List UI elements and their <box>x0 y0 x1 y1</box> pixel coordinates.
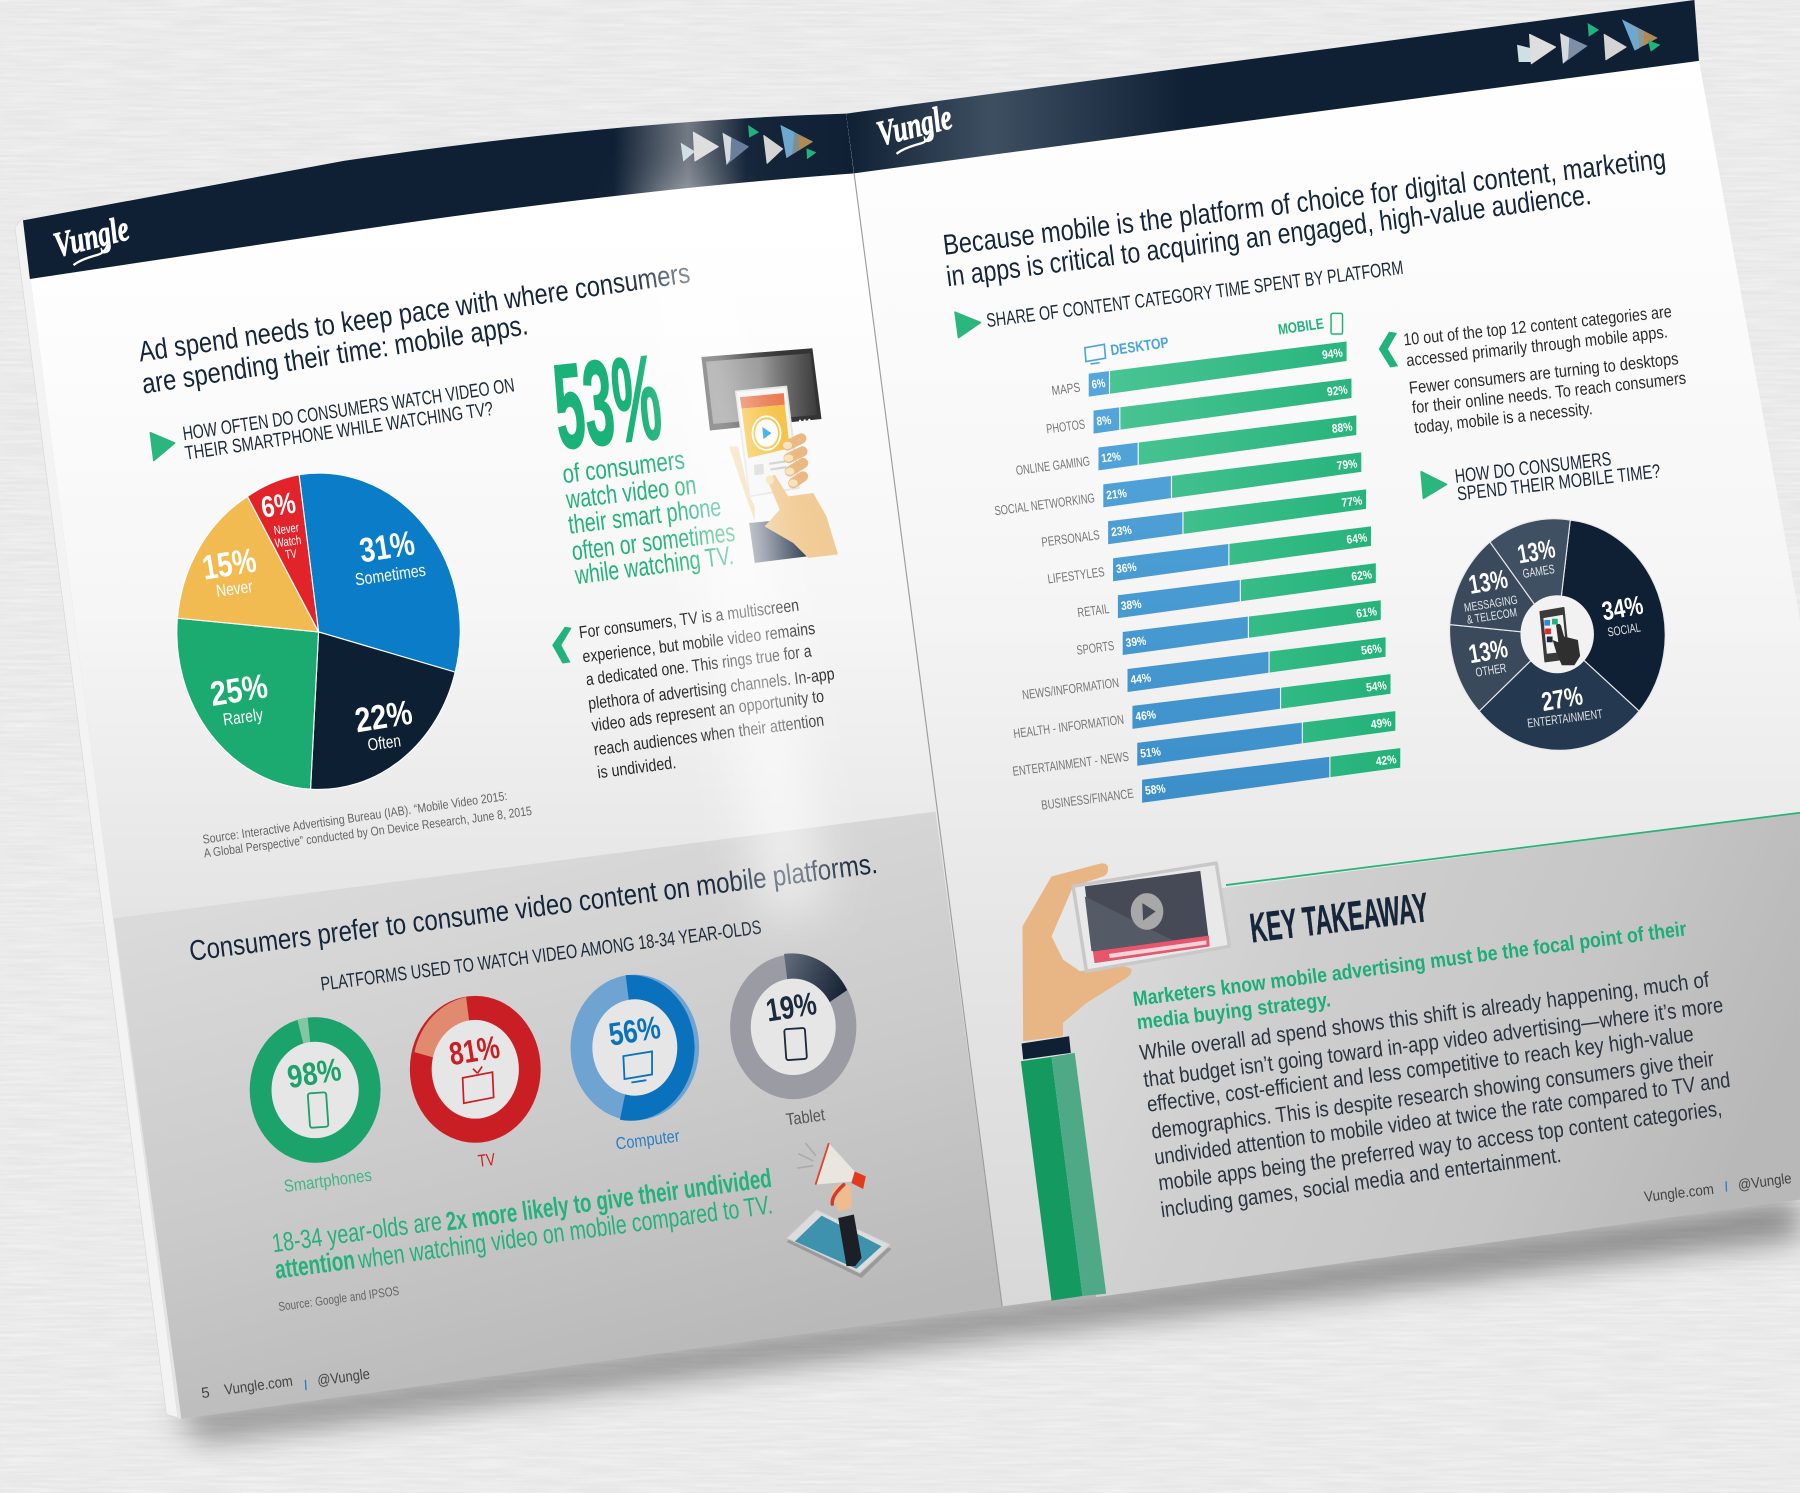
footer left <box>200 1366 371 1402</box>
text block: key takeaway body: demographics. This is despite research showing consumers give their <box>1150 1046 1715 1144</box>
bar row: news information: 44% <box>1130 670 1152 687</box>
lead: marketers know: Marketers know mobile advertising must be the focal point of their <box>1132 917 1688 1011</box>
text block: multiscreen paragraph: reach audiences when their attention <box>593 710 825 759</box>
pie labels: 22% <box>352 694 415 740</box>
callout: 18-34 year-olds: 18-34 year-olds are <box>270 1206 444 1258</box>
bar row: retail: 62% <box>1351 567 1373 584</box>
footer left: 5 <box>200 1384 211 1402</box>
header banner left <box>23 114 854 279</box>
text block: key takeaway body: effective, cost-efficient and less competitive to reach key high-value <box>1145 1021 1695 1117</box>
donut labels <box>1463 533 1645 731</box>
donut: TV 81 percent <box>410 996 541 1171</box>
bar row: business finance: 42% <box>1375 752 1397 769</box>
label: TV: TV <box>477 1149 497 1171</box>
bar row: online gaming: 88% <box>1331 419 1353 436</box>
bar row: retail <box>1076 563 1376 620</box>
brochure left page <box>15 114 1002 1419</box>
brochure shadow <box>172 1198 1800 1440</box>
text block: multiscreen paragraph: is undivided. <box>596 752 677 782</box>
bar row: maps: 6% <box>1091 376 1106 392</box>
bar row: social networking: 21% <box>1105 486 1128 502</box>
legend: desktop <box>1085 334 1170 364</box>
text block: key takeaway body: including games, social media and entertainment. <box>1159 1142 1563 1222</box>
panel: lower left gray background <box>114 812 1002 1419</box>
text block: multiscreen paragraph: plethora of advertising channels. In-app <box>587 663 836 713</box>
spine fold <box>854 173 1002 1306</box>
icon: phone with tapping hand <box>1540 608 1580 665</box>
callout: 18-34 year-olds <box>270 1163 774 1285</box>
bar row: entertainment news: ENTERTAINMENT - NEWS <box>1012 749 1130 779</box>
text block: top 12 categories: accessed primarily through mobile apps. <box>1405 321 1669 370</box>
bar row: entertainment news: 49% <box>1370 715 1392 732</box>
donut: smartphones 98 percent: 98% <box>285 1051 344 1095</box>
text block: multiscreen paragraph <box>578 595 836 782</box>
donut labels: 34% <box>1600 590 1645 626</box>
pie labels: Watch <box>274 533 302 551</box>
pie labels: Never <box>273 521 300 538</box>
pie labels: 6% <box>259 487 298 525</box>
callout text: of consumers: of consumers <box>561 444 686 489</box>
logo: Vungle right: Vungle <box>873 96 956 154</box>
callout: 18-34 year-olds: 2x more likely to give their undivided <box>444 1163 773 1237</box>
bar row: photos: 8% <box>1096 413 1112 429</box>
heading: ad spend: Ad spend needs to keep pace with where consumers <box>137 257 692 369</box>
donut labels: OTHER <box>1475 661 1507 680</box>
source note: IAB: Source: Interactive Advertising Bureau (IAB). “Mobile Video 2015: <box>202 789 508 847</box>
brochure right page <box>846 0 1800 1306</box>
subheading: share of content: SHARE OF CONTENT CATEGORY TIME SPENT BY PLATFORM <box>985 257 1405 332</box>
bar row: health information: 46% <box>1135 707 1157 724</box>
icon: green chevron <box>1379 332 1398 367</box>
donut labels: 13% <box>1515 533 1558 569</box>
bar row: retail: 38% <box>1120 597 1142 613</box>
donut labels: 27% <box>1539 680 1585 717</box>
donut labels: 13% <box>1466 633 1510 669</box>
donut: computer 56 percent <box>571 975 699 1154</box>
bar row: retail: RETAIL <box>1076 601 1110 620</box>
footer left: @Vungle <box>316 1366 371 1390</box>
text block: top 12 categories <box>1402 301 1687 437</box>
bar row: lifestyles: LIFESTYLES <box>1047 564 1106 586</box>
callout text: of consumers: watch video on <box>564 470 698 515</box>
bar row: online gaming <box>1015 415 1356 478</box>
callout: 18-34 year-olds: when watching video on mobile compared to TV. <box>355 1189 774 1275</box>
pie labels <box>200 487 427 755</box>
icon: green play triangle <box>1421 472 1446 498</box>
icon: television <box>463 1066 494 1103</box>
illustration: arm holding phone <box>1021 863 1229 1301</box>
text block: multiscreen paragraph: For consumers, TV is a multiscreen <box>578 595 800 642</box>
callout text: of consumers <box>561 444 737 590</box>
pie labels: Sometimes <box>354 560 427 589</box>
pie labels: Rarely <box>222 704 265 729</box>
source note: IAB: A Global Perspective” conducted by On Device Research, June 8, 2015 <box>203 804 533 860</box>
bar row: photos <box>1045 378 1351 436</box>
subheading: platforms used: PLATFORMS USED TO WATCH VIDEO AMONG 18-34 YEAR-OLDS <box>319 917 763 996</box>
bar row: personals: PERSONALS <box>1040 527 1101 550</box>
donut: tablet 19 percent <box>730 953 856 1130</box>
bar row: personals: 77% <box>1341 493 1363 510</box>
bar row: business finance <box>1040 748 1400 813</box>
donut labels: & TELECOM <box>1466 605 1518 627</box>
bar row: maps: MAPS <box>1051 380 1081 398</box>
bar row: lifestyles: 36% <box>1115 560 1138 576</box>
panel: key takeaway gray background <box>1062 813 1800 1297</box>
label: tablet: Tablet <box>785 1104 826 1130</box>
icon: megaphone rising from tablet <box>787 1143 892 1278</box>
pie labels: Often <box>366 730 402 755</box>
bar row: entertainment news <box>1012 711 1395 779</box>
bar row: business finance: 58% <box>1144 781 1167 798</box>
bar row: health information: 54% <box>1365 678 1388 695</box>
text block: multiscreen paragraph: experience, but mobile video remains <box>581 618 816 666</box>
footer right: @Vungle <box>1737 1170 1793 1194</box>
label: computer: Computer <box>614 1125 681 1154</box>
pie labels: 25% <box>208 667 270 714</box>
bar row: social networking: 79% <box>1336 456 1358 473</box>
bar row: photos: 92% <box>1326 382 1349 399</box>
subheading: how do consumers: HOW DO CONSUMERS <box>1454 448 1612 488</box>
logo: Vungle left: Vungle <box>50 208 133 265</box>
donut labels: GAMES <box>1522 562 1556 581</box>
heading: ad spend <box>137 257 692 401</box>
icon: smartphone <box>308 1092 328 1128</box>
text block: top 12 categories: Fewer consumers are turning to desktops <box>1408 348 1679 398</box>
label: smartphones: Smartphones <box>283 1165 373 1196</box>
heading: key takeaway: KEY TAKEAWAY <box>1247 884 1431 951</box>
bar row: personals <box>1040 489 1366 550</box>
icon: green play triangle <box>150 433 175 460</box>
subheading: how often: THEIR SMARTPHONE WHILE WATCHING TV? <box>184 398 495 465</box>
logo: Vungle left <box>50 208 133 265</box>
logo: Vungle right <box>873 96 956 154</box>
text block: multiscreen paragraph: a dedicated one. This rings true for a <box>585 641 813 689</box>
text block: key takeaway body <box>1138 967 1732 1222</box>
divider: green key takeaway rule <box>1226 813 1800 885</box>
bar row: maps <box>1051 342 1347 398</box>
bar row: news information: 56% <box>1360 641 1383 658</box>
text block: top 12 categories: today, mobile is a necessity. <box>1413 398 1593 437</box>
text block: top 12 categories: for their online needs. To reach consumers <box>1411 368 1687 417</box>
bar row: sports: 61% <box>1355 604 1378 621</box>
bar row: social networking <box>994 452 1361 518</box>
callout text: of consumers: often or sometimes <box>570 517 737 566</box>
legend: desktop: DESKTOP <box>1109 334 1170 359</box>
bar row: photos: PHOTOS <box>1045 416 1086 436</box>
icon: phone with video player <box>1073 863 1229 971</box>
pie labels: 15% <box>200 542 259 588</box>
heading: ad spend: are spending their time: mobile apps. <box>140 309 530 401</box>
bar row: online gaming: ONLINE GAMING <box>1015 453 1091 478</box>
pie chart: viewing frequency <box>177 473 460 789</box>
bar row: health information: HEALTH - INFORMATION <box>1012 712 1125 741</box>
bar row: health information <box>1012 674 1391 741</box>
icon: TV and hand holding phone <box>701 348 838 563</box>
callout text: of consumers: while watching TV. <box>572 540 735 590</box>
donut: smartphones 98 percent <box>250 1017 381 1196</box>
heading: because mobile: Because mobile is the platform of choice for digital content, marketing <box>941 143 1668 262</box>
donut: computer 56 percent: 56% <box>606 1009 663 1053</box>
donut: tablet 19 percent: 19% <box>763 985 819 1029</box>
text block: multiscreen paragraph: video ads represent an opportunity to <box>590 686 825 735</box>
legend: mobile: MOBILE <box>1277 315 1325 339</box>
text block: top 12 categories: 10 out of the top 12 content categories are <box>1402 301 1673 350</box>
bar row: sports <box>1076 600 1381 658</box>
pie labels: Never <box>215 576 254 601</box>
bar row: personals: 23% <box>1110 523 1133 539</box>
donut: TV 81 percent: 81% <box>447 1029 502 1072</box>
bar row: lifestyles <box>1047 526 1371 586</box>
footer right: Vungle.com <box>1643 1181 1715 1206</box>
pie labels: TV <box>284 546 298 562</box>
bar row: sports: SPORTS <box>1076 638 1115 658</box>
donut labels: 13% <box>1466 564 1510 600</box>
heading: consumers prefer: Consumers prefer to consume video content on mobile platforms. <box>187 848 879 968</box>
bar row: entertainment news: 51% <box>1139 744 1162 761</box>
donut chart: mobile time <box>1450 519 1665 750</box>
bar row: lifestyles: 64% <box>1346 530 1368 547</box>
bar row: sports: 39% <box>1125 634 1147 650</box>
footer left: Vungle.com <box>223 1373 294 1399</box>
callout: 18-34 year-olds: attention <box>273 1244 357 1285</box>
header banner right <box>846 0 1699 173</box>
bar row: online gaming: 12% <box>1101 449 1122 465</box>
subheading: how do consumers: SPEND THEIR MOBILE TIME? <box>1456 460 1662 505</box>
text: 53% <box>548 329 667 475</box>
icon: tablet <box>784 1028 807 1060</box>
pie labels: 31% <box>357 524 417 570</box>
icon: play thumbnails right header <box>1517 20 1661 64</box>
text block: key takeaway body: While overall ad spend shows this shift is already happening, much of <box>1138 967 1711 1065</box>
icon: green chevron <box>552 627 572 664</box>
bar row: social networking: SOCIAL NETWORKING <box>994 490 1096 518</box>
bar chart: content category share <box>994 342 1400 813</box>
donut labels: MESSAGING <box>1463 593 1519 615</box>
icon: green play triangle <box>955 312 980 337</box>
donut labels: SOCIAL <box>1607 620 1642 639</box>
source note: Google: Source: Google and IPSOS <box>278 1284 400 1314</box>
subheading: how often: HOW OFTEN DO CONSUMERS WATCH VIDEO ON <box>181 374 516 445</box>
bar row: business finance: BUSINESS/FINANCE <box>1040 786 1135 813</box>
donut labels: ENTERTAINMENT <box>1526 707 1604 731</box>
footer right <box>1643 1170 1793 1206</box>
bar row: news information: NEWS/INFORMATION <box>1021 675 1120 703</box>
icon: monitor <box>623 1052 652 1082</box>
icon: play thumbnails left header <box>681 125 816 165</box>
lead: marketers know: media buying strategy. <box>1135 988 1332 1034</box>
lead: marketers know <box>1132 917 1688 1034</box>
bar row: maps: 94% <box>1321 345 1344 362</box>
heading: because mobile: in apps is critical to acquiring an engaged, high-value audience. <box>944 179 1593 293</box>
bar row: news information <box>1021 637 1386 703</box>
callout text: of consumers: their smart phone <box>567 491 723 540</box>
